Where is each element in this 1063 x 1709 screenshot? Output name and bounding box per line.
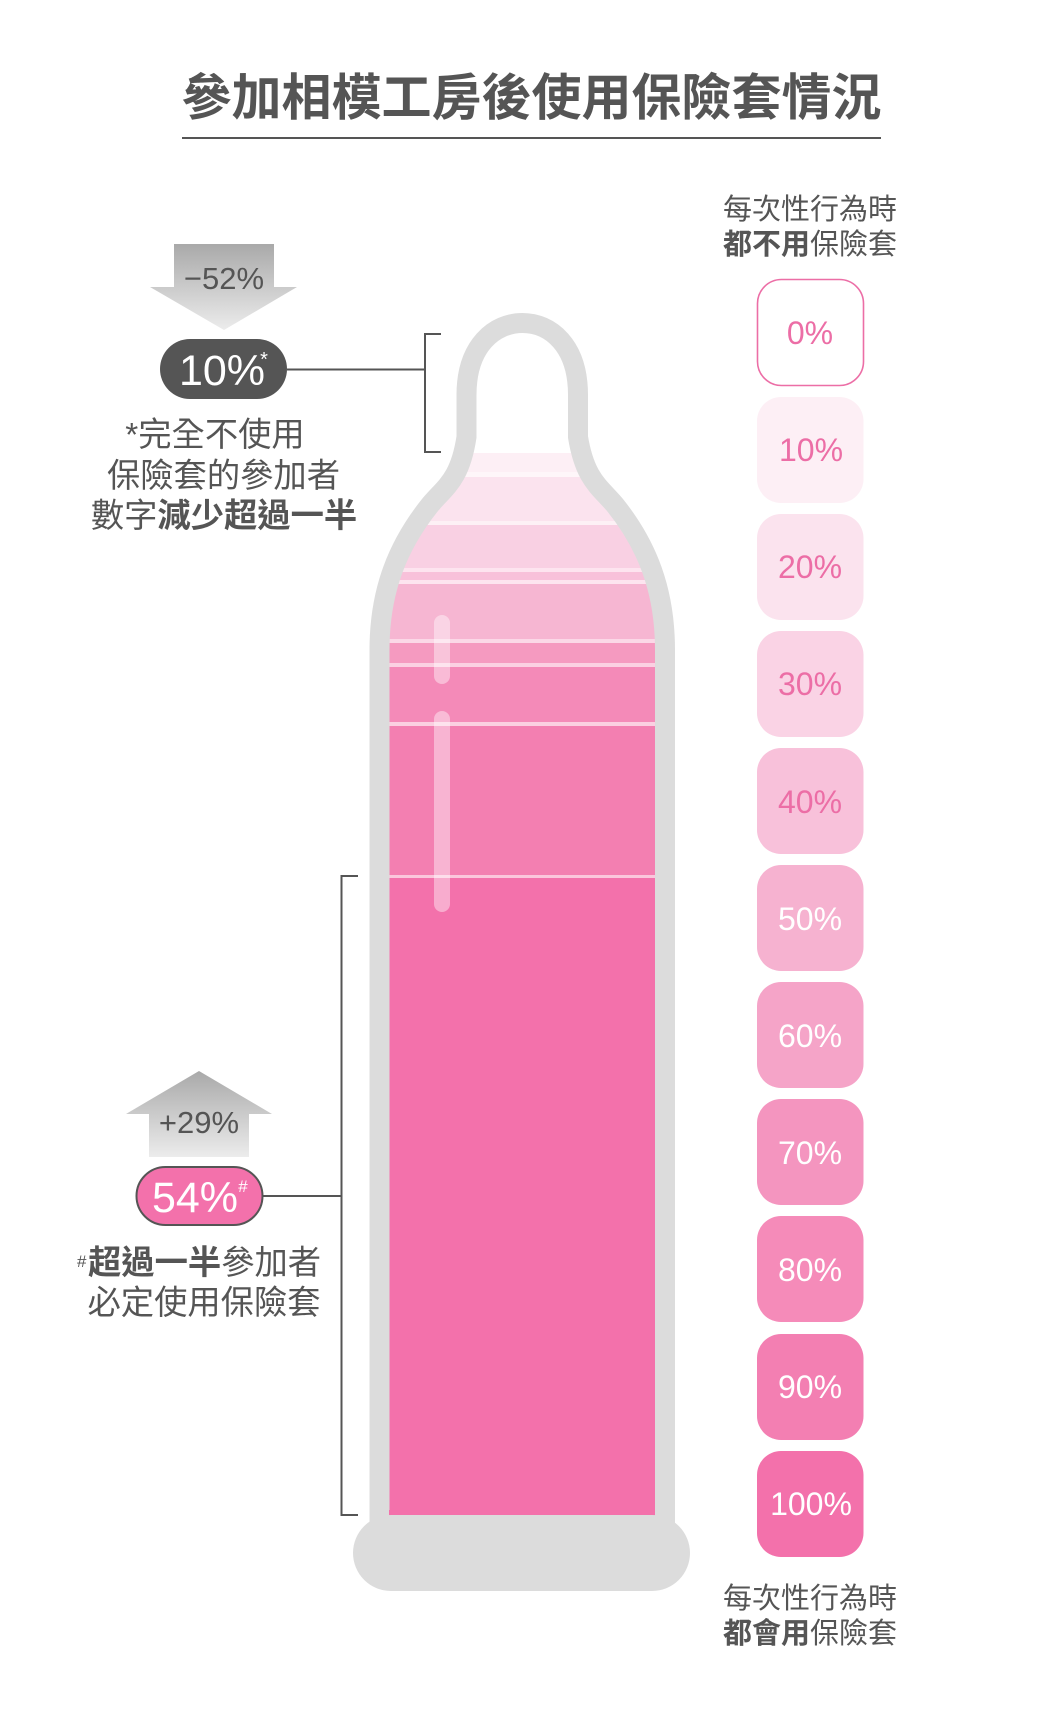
title: 參加相模工房後使用保險套情況 bbox=[182, 70, 882, 126]
arrow up bbox=[126, 1071, 272, 1157]
text block: never use note: 保險套的參加者 bbox=[107, 458, 340, 495]
tile 40% bbox=[757, 748, 864, 854]
scale heading: never bbox=[723, 193, 897, 261]
fill bottom edge bbox=[389, 1510, 655, 1515]
scale heading: never: 都不用保險套 bbox=[723, 228, 897, 261]
scale: percentage tiles bbox=[757, 280, 864, 1557]
tile 10%: 10% bbox=[779, 432, 843, 468]
scale heading: always: 都會用保險套 bbox=[723, 1617, 897, 1650]
tile 100% bbox=[757, 1451, 864, 1557]
tile 0% bbox=[758, 280, 864, 386]
tile 30% bbox=[757, 631, 864, 737]
tile 70% bbox=[757, 1099, 864, 1205]
tile 70%: 70% bbox=[778, 1135, 842, 1171]
tile 20%: 20% bbox=[778, 549, 842, 585]
callout: plus 29 percent bbox=[126, 1071, 272, 1157]
bracket: top group bbox=[287, 334, 441, 452]
tile 80% bbox=[757, 1216, 864, 1322]
tile 50% bbox=[757, 865, 864, 971]
tile 60%: 60% bbox=[778, 1018, 842, 1054]
condom outline bbox=[380, 323, 665, 1525]
highlight bar upper bbox=[434, 615, 450, 684]
callout: minus 52 percent bbox=[150, 244, 297, 330]
text block: always use note bbox=[77, 1245, 321, 1322]
tile 60% bbox=[757, 982, 864, 1088]
tile 80%: 80% bbox=[778, 1252, 842, 1288]
callout: 10 percent pill bbox=[160, 339, 287, 399]
callout: 10 percent pill: 10% bbox=[179, 347, 265, 395]
callout: 54 percent pill bbox=[136, 1167, 262, 1225]
tile 30%: 30% bbox=[778, 666, 842, 702]
text block: always use note: 超過一半參加者 bbox=[88, 1245, 321, 1282]
tile 20% bbox=[757, 514, 864, 620]
change label: +29% bbox=[159, 1105, 239, 1140]
panel: condom fill chart bbox=[353, 323, 690, 1591]
highlight bar lower bbox=[434, 711, 450, 912]
text block: always use note: 必定使用保險套 bbox=[88, 1285, 321, 1322]
bracket: bottom group bbox=[262, 876, 358, 1515]
tile 50%: 50% bbox=[778, 901, 842, 937]
fill bands bbox=[390, 453, 655, 1516]
condom base ring bbox=[353, 1515, 690, 1591]
arrow down bbox=[150, 244, 297, 330]
callout: 10 percent pill: * bbox=[260, 349, 268, 371]
text block: never use note bbox=[91, 417, 357, 535]
callout: 54 percent pill: 54% bbox=[152, 1174, 238, 1222]
change label: −52% bbox=[184, 261, 264, 296]
tile 40%: 40% bbox=[778, 784, 842, 820]
scale heading: always bbox=[723, 1582, 897, 1650]
text block: always use note: # bbox=[77, 1252, 87, 1271]
tile 100%: 100% bbox=[770, 1486, 852, 1522]
scale heading: always: 每次性行為時 bbox=[723, 1582, 897, 1615]
text block: never use note: 數字減少超過一半 bbox=[91, 498, 357, 535]
tile 0%: 0% bbox=[787, 315, 833, 351]
callout: 54 percent pill: # bbox=[238, 1177, 248, 1196]
tile 90% bbox=[757, 1334, 864, 1440]
tile 10% bbox=[757, 397, 864, 503]
tile 90%: 90% bbox=[778, 1369, 842, 1405]
text block: never use note: *完全不使用 bbox=[125, 417, 305, 454]
scale heading: never: 每次性行為時 bbox=[723, 193, 897, 226]
